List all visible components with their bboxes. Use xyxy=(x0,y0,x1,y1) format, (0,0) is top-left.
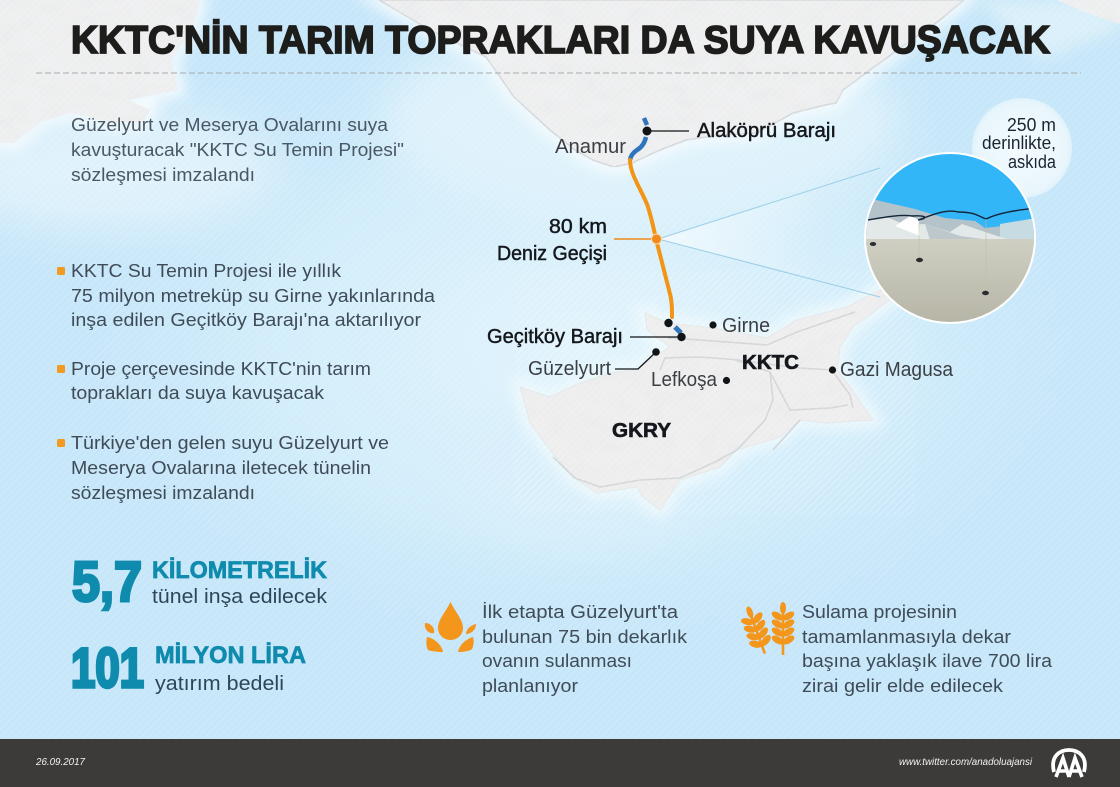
wheat stalk left xyxy=(736,602,777,658)
date: 26.09.2017 xyxy=(35,756,86,768)
intro text: kavuşturacak "KKTC Su Temin Projesi" xyxy=(71,139,404,160)
label: GKRY: GKRY xyxy=(612,420,672,442)
label: 80 km Deniz Geçişi xyxy=(497,216,607,265)
bullet 1: KKTC Su Temin Projesi ile yıllık xyxy=(71,260,342,281)
marker: 80 km sea crossing xyxy=(614,234,662,244)
label: Güzelyurt: Güzelyurt xyxy=(528,358,611,380)
bullet 1: 75 milyon metreküp su Girne yakınlarında xyxy=(71,285,436,306)
map: Cyprus island xyxy=(520,275,905,510)
intro text: sözleşmesi imzalandı xyxy=(71,164,255,185)
text: irrigation area: ovanın sulanması xyxy=(482,650,632,671)
label: Lefkoşa: Lefkoşa xyxy=(651,369,718,391)
detail circle: suspended pipeline under sea xyxy=(860,150,1040,329)
stat: 101 milyon lira: MİLYON LİRA xyxy=(155,642,306,669)
map: roads and borders xyxy=(553,312,855,487)
stat: 101 milyon lira: yatırım bedeli xyxy=(155,673,284,695)
text: income xyxy=(802,601,1053,696)
title divider xyxy=(36,72,1081,74)
callout bubble: depth: 250 m xyxy=(1007,115,1056,135)
callout bubble: depth xyxy=(972,98,1072,198)
text: irrigation area: planlanıyor xyxy=(482,675,578,696)
callout bubble: depth: askıda xyxy=(1008,152,1057,172)
label: Geçitköy Barajı xyxy=(487,319,686,348)
stat: 5,7 kilometrelik xyxy=(72,550,328,614)
icon: Anadolu Agency logo xyxy=(1053,750,1085,777)
land: Turkish south coast xyxy=(379,0,964,167)
label: Girne: Girne xyxy=(722,315,770,337)
bullet 3: sözleşmesi imzalandı xyxy=(71,482,255,503)
label: Gazi Magusa: Gazi Magusa xyxy=(840,359,954,381)
bullet list xyxy=(57,260,436,503)
stat: 5,7 kilometrelik: KİLOMETRELİK xyxy=(152,557,328,584)
bullet 3: Meserya Ovalarına iletecek tünelin xyxy=(71,457,371,478)
bullet 2 xyxy=(57,358,371,403)
route: pipeline xyxy=(630,118,681,333)
route: blue land section south xyxy=(675,327,681,333)
text: income: Sulama projesinin xyxy=(802,601,957,622)
bullet 2: toprakları da suya kavuşacak xyxy=(71,382,325,403)
wheat stalk right xyxy=(770,602,796,655)
text: income: zirai gelir elde edilecek xyxy=(802,675,1004,696)
label: Anamur: Anamur xyxy=(555,136,626,158)
text: irrigation area xyxy=(482,601,688,696)
title: KKTC'NİN TARIM TOPRAKLARI DA SUYA KAVUŞACAK xyxy=(71,19,1050,62)
callout bubble: depth: derinlikte, xyxy=(982,133,1056,153)
stat: 101 milyon lira: 101 xyxy=(71,636,144,699)
label: 80 km Deniz Geçişi: 80 km xyxy=(549,216,607,238)
bullet 3: Türkiye'den gelen suyu Güzelyurt ve xyxy=(71,432,389,453)
label: KKTC: KKTC xyxy=(742,352,799,374)
stat: 5,7 kilometrelik: tünel inşa edilecek xyxy=(152,586,328,608)
label: 80 km Deniz Geçişi: Deniz Geçişi xyxy=(497,243,607,265)
stat: 101 milyon lira xyxy=(71,636,306,699)
label: Güzelyurt xyxy=(528,348,660,380)
hatch on Cyprus xyxy=(515,270,915,515)
label: Geçitköy Barajı: Geçitköy Barajı xyxy=(487,326,623,348)
label: Alaköprü Barajı: Alaköprü Barajı xyxy=(697,120,836,142)
bullet 1 xyxy=(57,260,436,330)
bullet 2: Proje çerçevesinde KKTC'nin tarım xyxy=(71,358,371,379)
bullet 3 xyxy=(57,432,389,503)
route: blue land section north xyxy=(630,118,647,160)
intro text: Güzelyurt ve Meserya Ovalarını suya xyxy=(71,114,389,135)
text: income: başına yaklaşık ilave 700 lira xyxy=(802,650,1053,671)
zoom beam from route to detail circle xyxy=(658,168,890,297)
stat: 5,7 kilometrelik: 5,7 xyxy=(72,550,142,614)
bullet 1: inşa edilen Geçitköy Barajı'na aktarılıyor xyxy=(71,309,421,330)
icon: water drops xyxy=(425,602,476,652)
text: income: tamamlanmasıyla dekar xyxy=(802,626,1011,647)
twitter url: www.twitter.com/anadoluajansi xyxy=(899,756,1033,768)
route: orange sea crossing xyxy=(630,160,672,317)
text: irrigation area: İlk etapta Güzelyurt'ta xyxy=(482,601,679,622)
footer bar xyxy=(0,739,1120,787)
icon: wheat xyxy=(736,602,796,658)
land: north-west coast xyxy=(0,0,200,143)
land: north-east corner xyxy=(1057,0,1120,24)
intro text xyxy=(71,114,404,185)
text: irrigation area: bulunan 75 bin dekarlık xyxy=(482,626,688,647)
